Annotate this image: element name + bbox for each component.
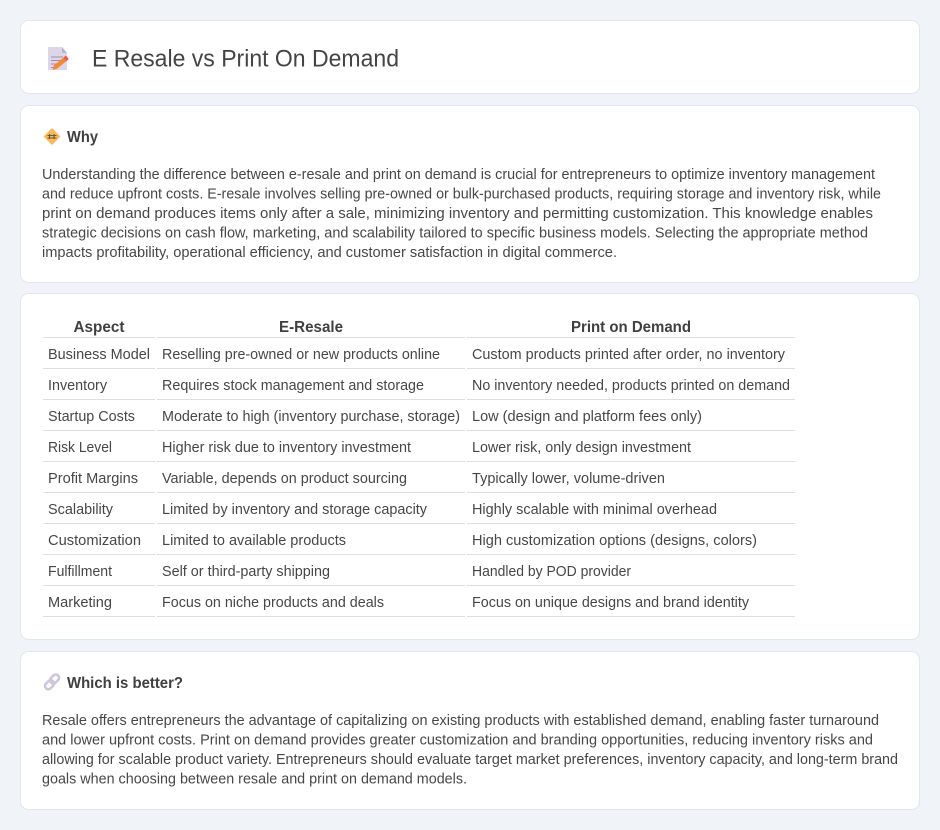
row: fulfillment: [48, 564, 631, 580]
row: marketing: Marketing: [48, 595, 112, 611]
row: customization: [48, 533, 757, 549]
row: risk level: Risk Level: [48, 440, 112, 456]
icon: document with pencil: [48, 47, 69, 70]
text block: why paragraph: [42, 167, 881, 261]
row: marketing: Focus on niche products and deals: [162, 595, 384, 611]
row: risk level: Higher risk due to inventory investment: [162, 440, 411, 456]
row: startup costs: Startup Costs: [48, 409, 135, 425]
heading: why: Why: [67, 129, 98, 146]
row: startup costs: Low (design and platform fees only): [472, 409, 702, 425]
row: profit margins: [48, 471, 665, 487]
table header: Aspect: [74, 319, 125, 336]
row: inventory: No inventory needed, products printed on demand: [472, 378, 790, 394]
row: scalability: Scalability: [48, 502, 114, 518]
table header: [74, 319, 691, 336]
text block: which is better paragraph: Resale offers entrepreneurs the advantage of capitalizing on existing products with established demand, enabling faster turnaround: [42, 713, 879, 729]
row: scalability: Limited by inventory and storage capacity: [162, 502, 428, 518]
panel: comparison table: [20, 294, 920, 640]
row: profit margins: Typically lower, volume-driven: [472, 471, 665, 487]
panel: why: [20, 106, 920, 282]
row: scalability: Highly scalable with minimal overhead: [472, 502, 717, 518]
row: customization: High customization options (designs, colors): [472, 533, 757, 549]
row: startup costs: [48, 409, 702, 425]
text block: which is better paragraph: allowing for scalable product variety. Entrepreneurs should evaluate target market preferences, inventory capacity, and long-term brand: [42, 752, 898, 768]
text block: which is better paragraph: [42, 713, 898, 788]
row: profit margins: Profit Margins: [48, 471, 138, 487]
row: inventory: [48, 378, 790, 394]
table header: E-Resale: [279, 319, 343, 336]
icon: chain link: [44, 673, 60, 691]
text block: why paragraph: impacts profitability, operational efficiency, and customer satisfaction in digital commerce.: [42, 245, 617, 261]
row: customization: Limited to available products: [162, 533, 346, 549]
row: customization: Customization: [48, 533, 141, 549]
row: startup costs: Moderate to high (inventory purchase, storage): [162, 409, 460, 425]
row: profit margins: Variable, depends on product sourcing: [162, 471, 407, 487]
panel: title header: [20, 20, 920, 94]
row: fulfillment: Fulfillment: [48, 564, 112, 580]
text block: why paragraph: Understanding the difference between e-resale and print on demand is crucial for entrepreneurs to optimize inventory management: [42, 167, 875, 183]
row: fulfillment: Handled by POD provider: [472, 564, 631, 580]
row: business model: Business Model: [48, 347, 150, 363]
row: inventory: Requires stock management and storage: [162, 378, 424, 394]
panel: which is better: [20, 652, 920, 810]
row: fulfillment: Self or third-party shipping: [162, 564, 330, 580]
row: marketing: Focus on unique designs and brand identity: [472, 595, 750, 611]
row: inventory: Inventory: [48, 378, 108, 394]
text block: which is better paragraph: and lower upfront costs. Print on demand provides greater customization and branding opportunities, reducing inventory risks and: [42, 732, 873, 748]
text block: which is better paragraph: goals when choosing between resale and print on demand models.: [42, 772, 467, 788]
title: E Resale vs Print On Demand: [92, 46, 399, 72]
text block: why paragraph: strategic decisions on cash flow, marketing, and scalability tailored to specific business models. Selecting the appropriate method: [42, 226, 868, 242]
heading: which is better: Which is better?: [67, 675, 183, 692]
row: business model: Custom products printed after order, no inventory: [472, 347, 786, 363]
row: risk level: [48, 440, 691, 456]
text block: why paragraph: and reduce upfront costs. E-resale involves selling pre-owned or bulk-purchased products, requiring storage and inventory risk, while: [42, 186, 881, 202]
row: marketing: [48, 595, 750, 611]
row: business model: [48, 347, 786, 363]
text block: why paragraph: print on demand produces items only after a sale, minimizing inventory and permitting customization. This knowledge enables: [42, 206, 873, 222]
row: risk level: Lower risk, only design investment: [472, 440, 691, 456]
icon: warning diamond: [44, 128, 60, 145]
row: scalability: [48, 502, 717, 518]
row: business model: Reselling pre-owned or new products online: [162, 347, 440, 363]
table header: Print on Demand: [571, 319, 691, 336]
